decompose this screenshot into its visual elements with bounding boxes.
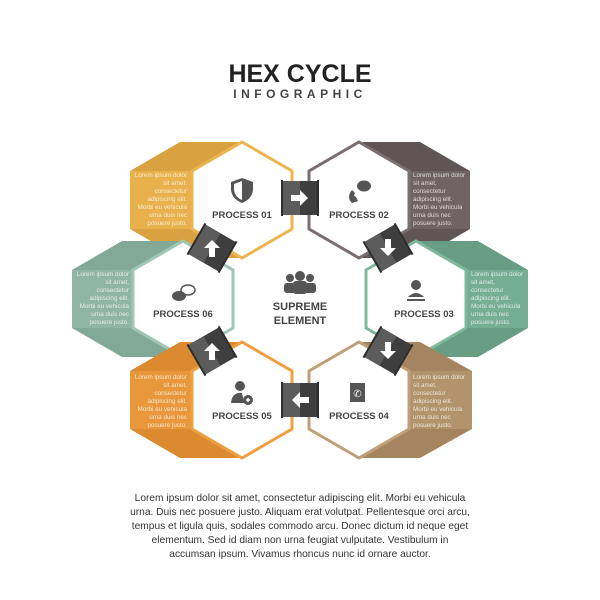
panel: process 03: urna duis nec [471, 311, 509, 318]
panel: process 03: PROCESS 03 [394, 309, 454, 320]
panel: process 01: posuere justo. [147, 220, 187, 227]
panel: process 03 [366, 241, 528, 357]
panel: process 04: PROCESS 04 [329, 411, 390, 422]
panel: process 06: posuere justo. [89, 319, 129, 326]
panel: process 06: adipiscing elit. [89, 295, 129, 302]
panel: process 05: Morbi eu vehicula [138, 406, 187, 413]
panel: process 01: Lorem ipsum dolor [135, 172, 187, 179]
panel: process 03: adipiscing elit. [471, 295, 511, 302]
panel: process 02: Morbi eu vehicula [413, 204, 463, 211]
panel: process 06: sit amet, [105, 279, 129, 286]
bottom paragraph: elementum. Sed id diam non urna feugiat vulputate. Vestibulum in [152, 535, 448, 546]
center: supreme element: ELEMENT [274, 315, 327, 327]
panel: process 05: PROCESS 05 [212, 411, 273, 422]
panel: process 05 [130, 342, 292, 458]
panel: process 03: consectetur [471, 287, 504, 294]
panel: process 04 [309, 342, 472, 458]
center: supreme element [273, 271, 327, 327]
title: INFOGRAPHIC [233, 87, 367, 101]
panel: process 05: Lorem ipsum dolor [135, 374, 187, 381]
panel: process 06: consectetur [96, 287, 129, 294]
icon: phone chat [349, 180, 371, 203]
panel: process 02: Lorem ipsum dolor [413, 172, 465, 179]
panel: process 06 [72, 241, 233, 357]
arrow: 06 to 01 [187, 223, 237, 273]
panel: process 05: posuere justo. [147, 422, 187, 429]
arrow: 01 to 02 [281, 180, 319, 216]
panel: process 05: adipiscing elit. [147, 398, 187, 405]
center: supreme element: SUPREME [273, 301, 327, 313]
bottom paragraph: Lorem ipsum dolor sit amet, consectetur adipiscing elit. Morbi eu vehicula [135, 493, 466, 504]
panel: process 01 [130, 142, 292, 258]
icon: phone book: ✆ [353, 389, 362, 400]
bottom paragraph: tempus et ligula quis, sodales commodo arcu. Donec dictum id neque eget [132, 521, 468, 532]
panel: process 04: sit amet, [413, 382, 437, 389]
icon: shield [231, 178, 253, 203]
panel: process 01: urna duis nec [149, 212, 187, 219]
panel: process 02: adipiscing elit. [413, 196, 453, 203]
bottom paragraph: accumsan ipsum. Vivamus rhoncus nunc id ornare auctor. [169, 549, 431, 560]
panel: process 01: sit amet, [163, 180, 187, 187]
icon: add user [231, 381, 253, 405]
panel: process 01: consectetur [154, 188, 187, 195]
arrow: 05 to 06 [187, 326, 237, 376]
panel: process 02: sit amet, [413, 180, 437, 187]
icon: user at laptop [407, 280, 425, 301]
panel: process 04: Morbi eu vehicula [413, 406, 463, 413]
title: HEX CYCLE [228, 60, 372, 88]
panel: process 02: PROCESS 02 [329, 210, 389, 221]
panel: process 03: Lorem ipsum dolor [471, 271, 523, 278]
panel: process 06: Morbi eu vehicula [80, 303, 129, 310]
arrow: 04 to 05 [281, 382, 319, 418]
panel: process 04: posuere justo. [413, 422, 453, 429]
panel: process 05: sit amet, [163, 382, 187, 389]
panel: process 04: consectetur [413, 390, 446, 397]
panel: process 06: PROCESS 06 [153, 309, 213, 320]
panel: process 02 [309, 142, 470, 258]
panel: process 01: adipiscing elit. [147, 196, 187, 203]
panel: process 06: Lorem ipsum dolor [77, 271, 129, 278]
bottom paragraph: urna. Duis nec posuere justo. Aliquam erat volutpat. Pellentesque orci arcu, [130, 507, 470, 518]
panel: process 04: adipiscing elit. [413, 398, 453, 405]
title [228, 60, 372, 101]
panel: process 03: sit amet, [471, 279, 495, 286]
panel: process 02: posuere justo. [413, 220, 453, 227]
panel: process 04: urna duis nec [413, 414, 451, 421]
panel: process 02: consectetur [413, 188, 446, 195]
panel: process 01: PROCESS 01 [212, 210, 273, 221]
panel: process 05: consectetur [154, 390, 187, 397]
panel: process 04: Lorem ipsum dolor [413, 374, 465, 381]
panel: process 02: urna duis nec [413, 212, 451, 219]
arrow: 03 to 04 [363, 326, 413, 376]
icon: chat bubbles [172, 285, 195, 301]
bottom paragraph [130, 493, 470, 560]
panel: process 03: Morbi eu vehicula [471, 303, 521, 310]
panel: process 06: urna duis nec [91, 311, 129, 318]
panel: process 03: posuere justo. [471, 319, 511, 326]
panel: process 05: urna duis nec [149, 414, 187, 421]
arrow: 02 to 03 [363, 223, 413, 273]
icon: phone book [350, 383, 365, 402]
panel: process 01: Morbi eu vehicula [138, 204, 187, 211]
